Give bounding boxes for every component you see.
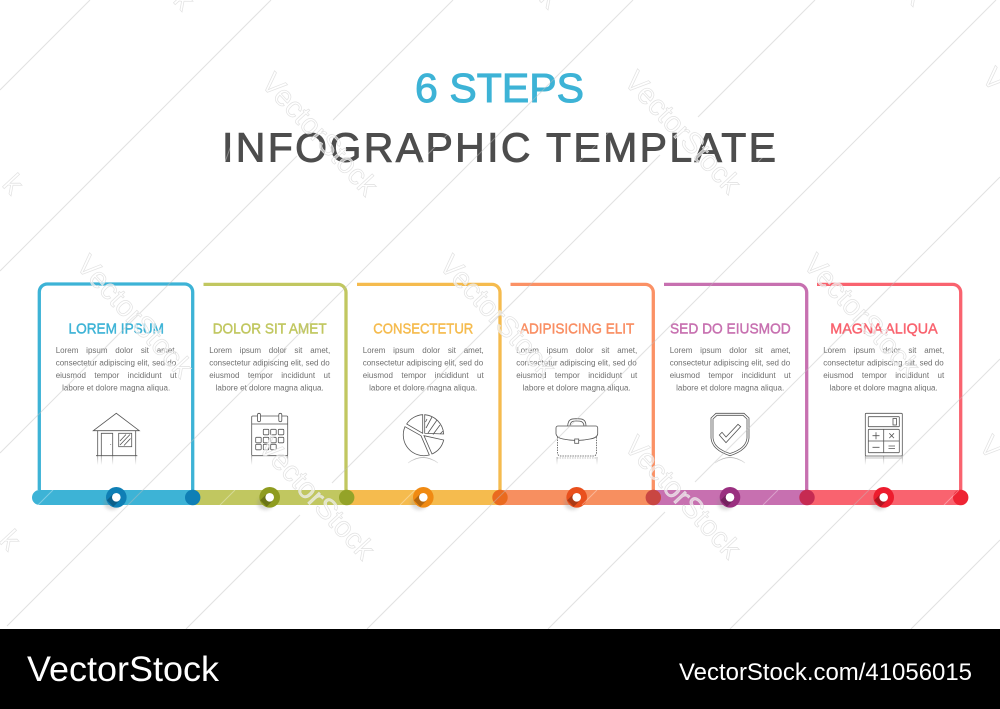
panel heading: DOLOR SIT AMET xyxy=(213,320,327,338)
panel text: Lorem ipsum dolor sit amet, xyxy=(363,346,484,355)
icon: calculator xyxy=(865,413,902,465)
joint dots xyxy=(185,490,968,505)
panel text: labore et dolore magna aliqua. xyxy=(216,384,324,392)
panel text: labore et dolore magna aliqua. xyxy=(62,384,170,392)
panel text: eiusmod tempor incididunt ut xyxy=(209,371,331,380)
panel text xyxy=(56,346,178,392)
watermark stamps: VectorStock xyxy=(252,431,381,567)
icon: briefcase xyxy=(556,419,598,465)
watermark stamps xyxy=(0,0,1000,567)
title xyxy=(222,65,776,170)
icon: shield xyxy=(711,413,749,463)
panel text: eiusmod tempor incididunt ut xyxy=(56,371,178,380)
panel text xyxy=(823,346,945,392)
panel frame xyxy=(39,284,193,490)
bar segment 1 xyxy=(32,490,193,505)
panel text: consectetur adipiscing elit, sed do xyxy=(209,358,330,368)
panel heading: CONSECTETUR xyxy=(373,320,473,338)
panel text: eiusmod tempor incididunt ut xyxy=(363,371,485,380)
panel heading: MAGNA ALIQUA xyxy=(830,320,938,338)
watermark stamps: VectorStock xyxy=(618,65,747,201)
panel text: eiusmod tempor incididunt ut xyxy=(516,371,638,380)
heading: 6 steps: 6 STEPS xyxy=(415,65,584,111)
icon: house xyxy=(93,413,139,465)
marker 2 xyxy=(257,487,280,510)
panel text: consectetur adipiscing elit, sed do xyxy=(670,358,791,368)
panel text: labore et dolore magna aliqua. xyxy=(830,384,938,392)
panel frame xyxy=(510,284,653,490)
panel frame xyxy=(664,284,807,490)
icon: calendar xyxy=(252,413,288,465)
marker 5 xyxy=(718,487,740,510)
panel: sed do eiusmod xyxy=(664,284,807,490)
panel heading: ADIPISICING ELIT xyxy=(520,320,634,338)
panel text xyxy=(670,346,792,392)
watermark stamps: VectorStock xyxy=(255,67,384,203)
panel: magna aliqua xyxy=(817,284,961,490)
panel text: labore et dolore magna aliqua. xyxy=(676,384,784,392)
watermark stamps: VectorStock xyxy=(618,430,747,566)
panel: lorem ipsum xyxy=(39,284,193,490)
panel heading: SED DO EIUSMOD xyxy=(670,320,791,338)
panel frame xyxy=(357,284,500,490)
bar segment 2 xyxy=(193,490,347,505)
panel heading: LOREM IPSUM xyxy=(68,320,164,338)
watermark stamps: VectorStock xyxy=(797,248,926,384)
panel text: Lorem ipsum dolor sit amet, xyxy=(209,346,330,355)
panel: dolor sit amet xyxy=(204,284,346,490)
panel text: labore et dolore magna aliqua. xyxy=(369,384,477,392)
panel text: consectetur adipiscing elit, sed do xyxy=(56,358,177,368)
watermark stamps: VectorStock xyxy=(70,249,199,385)
panel: consectetur xyxy=(357,284,500,490)
panel text: labore et dolore magna aliqua. xyxy=(523,384,631,392)
panel: adipisicing elit xyxy=(510,284,653,490)
panel text xyxy=(363,346,485,392)
bar segment 4 xyxy=(500,490,653,505)
icon: pie chart xyxy=(403,415,444,463)
panel text: Lorem ipsum dolor sit amet, xyxy=(516,346,637,355)
panel frame xyxy=(204,284,346,490)
marker 1 xyxy=(104,487,127,510)
footer bar xyxy=(0,629,1000,709)
marker 4 xyxy=(564,487,587,510)
marker 6 xyxy=(871,487,894,510)
panel text xyxy=(516,346,638,392)
heading: infographic template: INFOGRAPHIC TEMPLATE xyxy=(222,124,776,170)
bar segment 3 xyxy=(347,490,500,505)
bar segment 6 xyxy=(807,490,961,505)
panel text: consectetur adipiscing elit, sed do xyxy=(823,358,944,368)
panel text: consectetur adipiscing elit, sed do xyxy=(516,358,637,368)
panel text xyxy=(209,346,331,392)
bar segment 5 xyxy=(653,490,807,505)
watermark stamps: VectorStock xyxy=(433,249,562,385)
panel text: Lorem ipsum dolor sit amet, xyxy=(670,346,791,355)
panel text: eiusmod tempor incididunt ut xyxy=(823,371,945,380)
panel text: consectetur adipiscing elit, sed do xyxy=(363,358,484,368)
panel text: eiusmod tempor incididunt ut xyxy=(670,371,792,380)
timeline bar xyxy=(32,487,968,510)
marker 3 xyxy=(411,487,434,510)
panel frame xyxy=(817,284,961,490)
footer image id: VectorStock.com/41056015 xyxy=(679,659,972,686)
footer logo text: VectorStock xyxy=(27,650,220,689)
panel text: Lorem ipsum dolor sit amet, xyxy=(823,346,944,355)
panel text: Lorem ipsum dolor sit amet, xyxy=(56,346,177,355)
